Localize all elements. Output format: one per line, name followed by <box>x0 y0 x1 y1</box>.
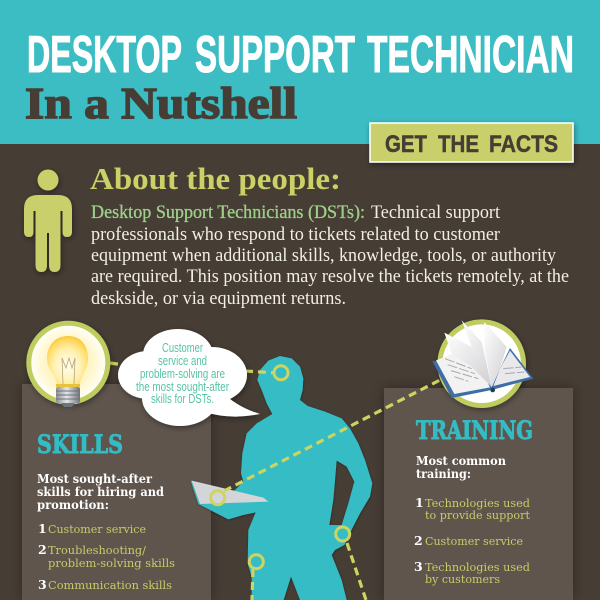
text block: definition: Desktop Support Technicians (DSTs): <box>91 203 365 223</box>
list: top training <box>414 495 531 586</box>
text block: definition: professionals who respond to tickets related to customer <box>91 225 500 245</box>
list: top skills: 3 <box>38 577 47 592</box>
text block: definition <box>91 203 569 309</box>
button: get the facts: FACTS <box>489 131 558 158</box>
title <box>25 26 574 128</box>
callout text: problem-solving are <box>140 366 225 381</box>
list: top training: Technologies used <box>425 496 531 510</box>
callout text: service and <box>158 353 207 368</box>
list: top skills <box>38 521 175 592</box>
list: top skills: 1 <box>38 521 47 536</box>
list: top training: Technologies used <box>425 560 531 574</box>
callout: speech cloud <box>118 329 260 426</box>
button: get the facts: GET <box>385 131 427 158</box>
panel: training <box>384 388 573 600</box>
list: top skills: 2 <box>38 542 47 557</box>
text block: definition: are required. This position may resolve the tickets remotely, at the <box>91 267 569 287</box>
list: top skills: Communication skills <box>48 578 172 592</box>
list: top training: Customer service <box>425 534 523 548</box>
list: top training: 2 <box>414 533 423 548</box>
callout text: skills for DSTs. <box>151 391 214 406</box>
text: training intro <box>416 453 506 481</box>
icon: person <box>24 170 72 272</box>
text: training intro: Most common <box>416 453 506 468</box>
panel: skills <box>22 384 211 600</box>
title: SUPPORT <box>195 26 355 84</box>
callout text: the most sought-after <box>136 379 230 394</box>
connector lines and markers <box>110 363 440 600</box>
text block: definition: deskside, or via equipment returns. <box>91 289 346 309</box>
button: get the facts <box>370 123 573 162</box>
list: top skills: Troubleshooting/ <box>48 543 146 557</box>
callout text <box>136 340 230 406</box>
header band <box>0 0 600 144</box>
heading: skills: SKILLS <box>37 430 123 459</box>
list: top training: 3 <box>414 559 423 574</box>
heading: about the people: About the people: <box>90 161 341 196</box>
text: skills intro: promotion: <box>37 497 109 512</box>
text: training intro: training: <box>416 466 471 481</box>
callout text: Customer <box>162 340 203 355</box>
icon: light bulb <box>29 323 108 407</box>
title: In a Nutshell <box>25 79 297 128</box>
text: skills intro <box>37 471 164 512</box>
title: DESKTOP <box>27 26 182 84</box>
text block: definition: equipment when additional skills, knowledge, tools, or authority <box>91 246 557 266</box>
icon: open book <box>432 320 533 406</box>
text block: definition: Technical support <box>371 203 501 223</box>
tablet <box>191 481 268 510</box>
list: top skills: Customer service <box>48 522 146 536</box>
text: skills intro: skills for hiring and <box>37 484 164 499</box>
figure: technician silhouette <box>191 356 372 600</box>
list: top training: 1 <box>415 495 424 510</box>
button: get the facts: THE <box>438 131 479 158</box>
heading: training: TRAINING <box>416 416 533 445</box>
list: top training: to provide support <box>425 508 530 522</box>
list: top training: by customers <box>425 572 500 586</box>
list: top skills: problem-solving skills <box>48 556 175 570</box>
text: skills intro: Most sought-after <box>37 471 152 486</box>
